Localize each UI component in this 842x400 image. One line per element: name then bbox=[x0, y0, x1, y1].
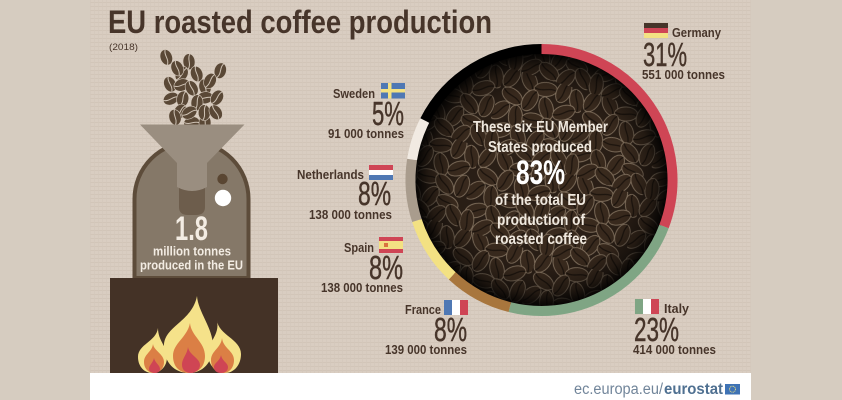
roaster caption line 2: produced in the EU bbox=[140, 258, 243, 272]
segment: Netherlands bbox=[410, 160, 417, 220]
icon: French flag bbox=[444, 300, 468, 315]
roaster body bbox=[134, 142, 248, 278]
label: Spain: Spain bbox=[344, 240, 374, 255]
left flame bbox=[138, 328, 167, 373]
label: Spain bbox=[321, 237, 403, 295]
icon: white dial bbox=[215, 190, 231, 206]
centre flame bbox=[164, 296, 213, 373]
icon: German flag bbox=[644, 23, 668, 38]
label: Spain: 8% bbox=[369, 249, 403, 286]
roaster chute bbox=[179, 180, 205, 215]
centre text: These six EU Member bbox=[473, 119, 608, 136]
icon: Dutch flag bbox=[369, 165, 393, 180]
icon: Swedish flag bbox=[381, 83, 405, 98]
icon: flames bbox=[138, 296, 241, 373]
eurostat wordmark: eurostat bbox=[664, 381, 723, 398]
footer strip bbox=[90, 373, 751, 400]
label: Sweden: 91 000 tonnes bbox=[328, 126, 404, 141]
label: France bbox=[385, 300, 468, 357]
label: Netherlands: Netherlands bbox=[297, 167, 364, 182]
segment: Italy bbox=[510, 226, 664, 311]
icon: Italian flag bbox=[635, 299, 659, 314]
icon: funnel bbox=[140, 124, 244, 191]
right flame bbox=[208, 320, 241, 373]
centre text: of the total EU bbox=[495, 192, 586, 209]
label: Netherlands bbox=[297, 165, 393, 222]
centre text: roasted coffee bbox=[495, 231, 587, 248]
label: Italy bbox=[633, 299, 716, 357]
chart: coffee bean circle bbox=[410, 49, 673, 311]
label: Netherlands: 8% bbox=[358, 175, 391, 212]
label: Italy: 23% bbox=[634, 311, 679, 348]
label: Germany bbox=[642, 23, 725, 82]
centre text: production of bbox=[497, 212, 586, 229]
icon: dark dial bbox=[217, 174, 228, 184]
year: (2018) bbox=[109, 42, 138, 53]
segment: Spain bbox=[417, 220, 452, 276]
source url: ec.europa.eu/ bbox=[574, 381, 664, 398]
label: France: 139 000 tonnes bbox=[385, 342, 467, 357]
firebox bbox=[110, 278, 278, 373]
label: Germany: 31% bbox=[643, 36, 687, 73]
segment: others bbox=[425, 49, 542, 120]
label: Sweden: Sweden bbox=[333, 86, 375, 101]
segment: France bbox=[452, 276, 510, 307]
centre text: States produced bbox=[488, 139, 592, 156]
label: Germany: Germany bbox=[672, 25, 722, 40]
segment: Sweden bbox=[412, 120, 425, 160]
roaster caption line 1: million tonnes bbox=[153, 244, 231, 258]
background panel bbox=[90, 0, 751, 373]
icon: falling coffee beans bbox=[158, 48, 228, 131]
roaster figure: 1.8 bbox=[175, 210, 208, 248]
title: EU roasted coffee production bbox=[108, 4, 492, 40]
label: Germany: 551 000 tonnes bbox=[642, 67, 725, 82]
label: Sweden bbox=[328, 83, 405, 141]
icon: EU flag bbox=[725, 384, 740, 394]
label: Netherlands: 138 000 tonnes bbox=[309, 207, 392, 222]
icon: Spanish flag bbox=[379, 237, 403, 253]
segment: Germany bbox=[542, 49, 673, 226]
label: Italy: Italy bbox=[664, 301, 690, 316]
label: Spain: 138 000 tonnes bbox=[321, 280, 403, 295]
label: France: France bbox=[405, 302, 441, 317]
label: Italy: 414 000 tonnes bbox=[633, 342, 716, 357]
label: France: 8% bbox=[434, 311, 467, 348]
label: Sweden: 5% bbox=[372, 95, 404, 132]
centre text bbox=[473, 119, 608, 248]
centre text: 83% bbox=[516, 154, 565, 192]
